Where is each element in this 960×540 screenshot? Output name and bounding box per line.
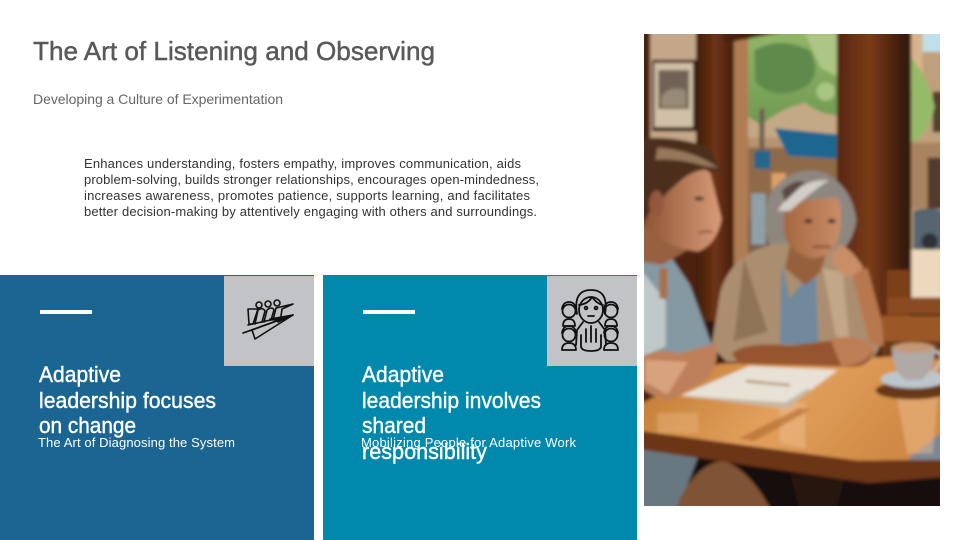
papers and pen — [681, 366, 838, 409]
accent bar — [363, 310, 415, 314]
woman right: neck and face — [785, 244, 829, 285]
card heading: Adaptive — [362, 362, 444, 387]
wall and framed picture — [647, 34, 700, 146]
lower window frame and ledge — [887, 270, 909, 316]
subtitle: Developing a Culture of Experimentation — [33, 91, 283, 107]
body text block: better decision-making by attentively engaging with others and surroundings. — [84, 204, 537, 219]
woman left: shirt — [644, 257, 714, 356]
icon tile: paper plane team — [224, 276, 314, 366]
card heading — [39, 362, 216, 438]
body text block: Enhances understanding, fosters empathy, improves communication, aids — [84, 156, 522, 171]
right window — [908, 50, 940, 251]
photo: two women listening at a cafe table — [641, 29, 949, 511]
card heading: on change — [39, 413, 136, 438]
woman left: hair — [641, 138, 723, 229]
woman right: hair highlights — [778, 180, 829, 211]
card subtitle: The Art of Diagnosing the System — [38, 435, 235, 450]
panel: adaptive leadership involves shared responsibility — [323, 275, 637, 540]
card heading — [362, 362, 541, 464]
woman right: arm and hand — [732, 339, 874, 367]
coffee cup and saucer — [876, 381, 949, 400]
card heading: leadership focuses — [39, 388, 216, 413]
body text block: increases awareness, promotes patience, supports learning, and facilitates — [84, 188, 530, 203]
body text block — [84, 156, 539, 219]
card heading: Adaptive — [39, 362, 121, 387]
table legs shadow and lap — [688, 458, 940, 506]
card heading: leadership involves — [362, 388, 541, 413]
street through window — [746, 35, 840, 180]
card heading: responsibility — [362, 439, 487, 464]
body text block: problem-solving, builds stronger relationships, encourages open-mindedness, — [84, 172, 539, 187]
icon tile: leader with team — [547, 276, 637, 366]
card heading: shared — [362, 413, 426, 438]
woman left: neck and face — [641, 224, 688, 265]
woman left: arm — [641, 343, 717, 401]
window post — [837, 29, 910, 335]
card subtitle: Mobilizing People for Adaptive Work — [361, 435, 576, 450]
panel: adaptive leadership focuses on change — [0, 275, 314, 540]
woman right: cardigan — [711, 243, 882, 362]
accent bar — [40, 310, 92, 314]
top beam — [723, 34, 782, 44]
table — [641, 357, 943, 461]
woman right: hair back — [764, 170, 856, 250]
title: The Art of Listening and Observing — [33, 36, 435, 66]
